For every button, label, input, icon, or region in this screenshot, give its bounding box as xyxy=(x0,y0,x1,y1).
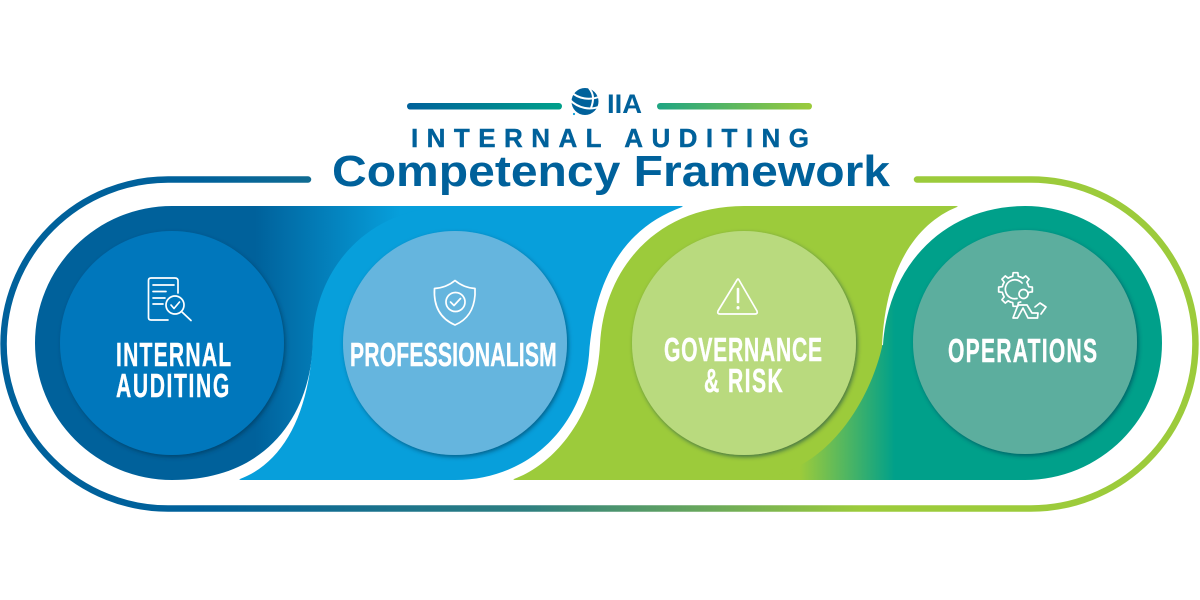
label: INTERNAL xyxy=(116,336,231,373)
icon: document with magnifier xyxy=(148,278,191,320)
panel: governance and risk background xyxy=(513,206,958,480)
icon: warning triangle xyxy=(718,279,757,314)
label: AUDITING xyxy=(116,367,229,404)
logo rule: right xyxy=(657,103,812,110)
circle xyxy=(913,230,1137,454)
label: GOVERNANCE xyxy=(664,331,822,368)
label: & RISK xyxy=(704,362,783,399)
logo rule: left xyxy=(407,103,562,110)
label xyxy=(664,331,822,399)
panel: professionalism background xyxy=(239,206,683,480)
circle xyxy=(343,231,567,455)
circle xyxy=(632,231,856,455)
panel: operations background xyxy=(720,206,1162,480)
label: PROFESSIONALISM xyxy=(350,336,557,373)
icon: globe xyxy=(570,88,601,115)
panel: internal auditing background xyxy=(35,206,480,480)
circle xyxy=(60,231,284,455)
heading: Competency Framework: Competency Framework xyxy=(332,147,891,196)
panel: operations xyxy=(913,230,1137,454)
panel: professionalism xyxy=(343,231,567,455)
heading: Internal Auditing: INTERNAL AUDITING xyxy=(411,123,809,153)
icon: shield with check xyxy=(434,280,475,325)
logo: IIA xyxy=(570,88,642,119)
logo wordmark: IIA xyxy=(607,89,642,119)
label: OPERATIONS xyxy=(948,332,1097,369)
icon: gear with person xyxy=(999,273,1046,318)
panel: internal auditing xyxy=(60,231,284,455)
outer ring outline xyxy=(4,180,1195,508)
label xyxy=(116,336,231,404)
panel: governance and risk xyxy=(632,231,856,455)
